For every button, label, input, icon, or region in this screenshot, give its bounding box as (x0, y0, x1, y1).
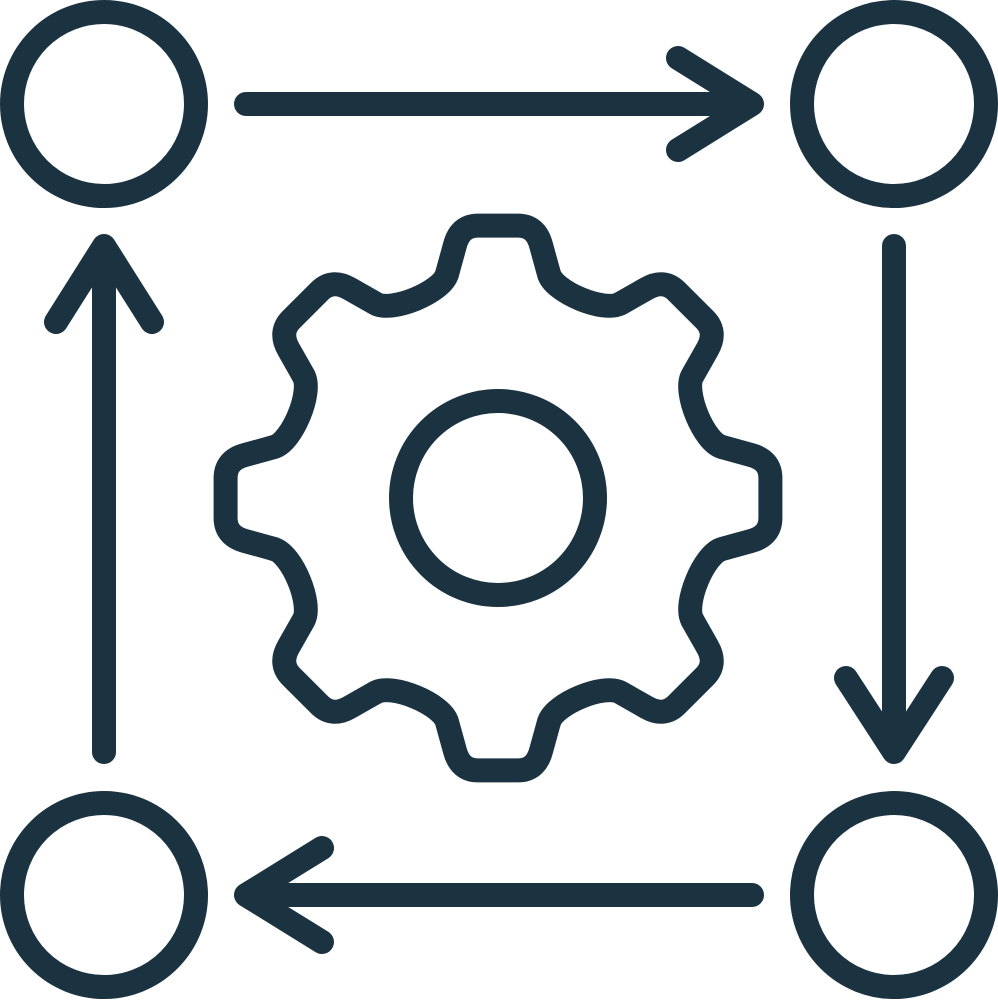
arrow: left, pointing up (56, 246, 152, 752)
circle: bottom-right node (802, 803, 986, 987)
arrow: right, pointing down (846, 246, 942, 752)
circle: top-left node (12, 12, 196, 196)
arrow: bottom, pointing left (246, 848, 752, 942)
arrow: top, pointing right (246, 58, 752, 150)
circle: bottom-left node (12, 803, 196, 987)
circle: top-right node (802, 12, 986, 196)
icon: gear (219, 219, 777, 777)
